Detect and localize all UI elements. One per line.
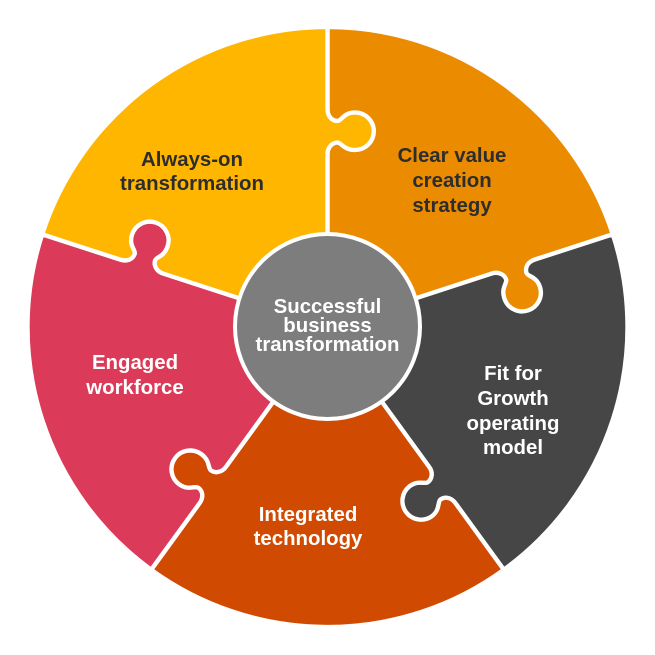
- label: Fit for Growth operating model: operating: [467, 413, 559, 435]
- center label: Successful business transformation: business: [283, 315, 372, 337]
- center circle: [235, 234, 420, 419]
- puzzle segment: Fit for Growth operating model: [328, 234, 627, 570]
- label: Integrated technology: Integrated: [259, 504, 357, 526]
- label: Always-on transformation: transformation: [120, 173, 264, 195]
- puzzle segment: Integrated technology: [151, 327, 504, 627]
- center label: Successful business transformation: Successful: [274, 296, 381, 318]
- label: Clear value creation strategy: strategy: [412, 195, 492, 217]
- label: Engaged workforce: Engaged: [92, 352, 178, 374]
- label: Fit for Growth operating model: Growth: [477, 388, 549, 410]
- label: Clear value creation strategy: creation: [412, 170, 492, 192]
- label: Fit for Growth operating model: model: [483, 437, 543, 459]
- label: Fit for Growth operating model: Fit for: [484, 363, 542, 385]
- label: Always-on transformation: Always-on: [141, 149, 243, 171]
- puzzle segment: Clear value creation strategy: [328, 27, 613, 327]
- center label: Successful business transformation: transformation: [256, 334, 399, 356]
- label: Integrated technology: technology: [254, 528, 363, 550]
- puzzle segment: Engaged workforce: [28, 222, 328, 570]
- label: Engaged workforce: workforce: [85, 377, 184, 399]
- label: Clear value creation strategy: Clear value: [398, 145, 506, 167]
- puzzle segment: Always-on transformation: [42, 27, 374, 327]
